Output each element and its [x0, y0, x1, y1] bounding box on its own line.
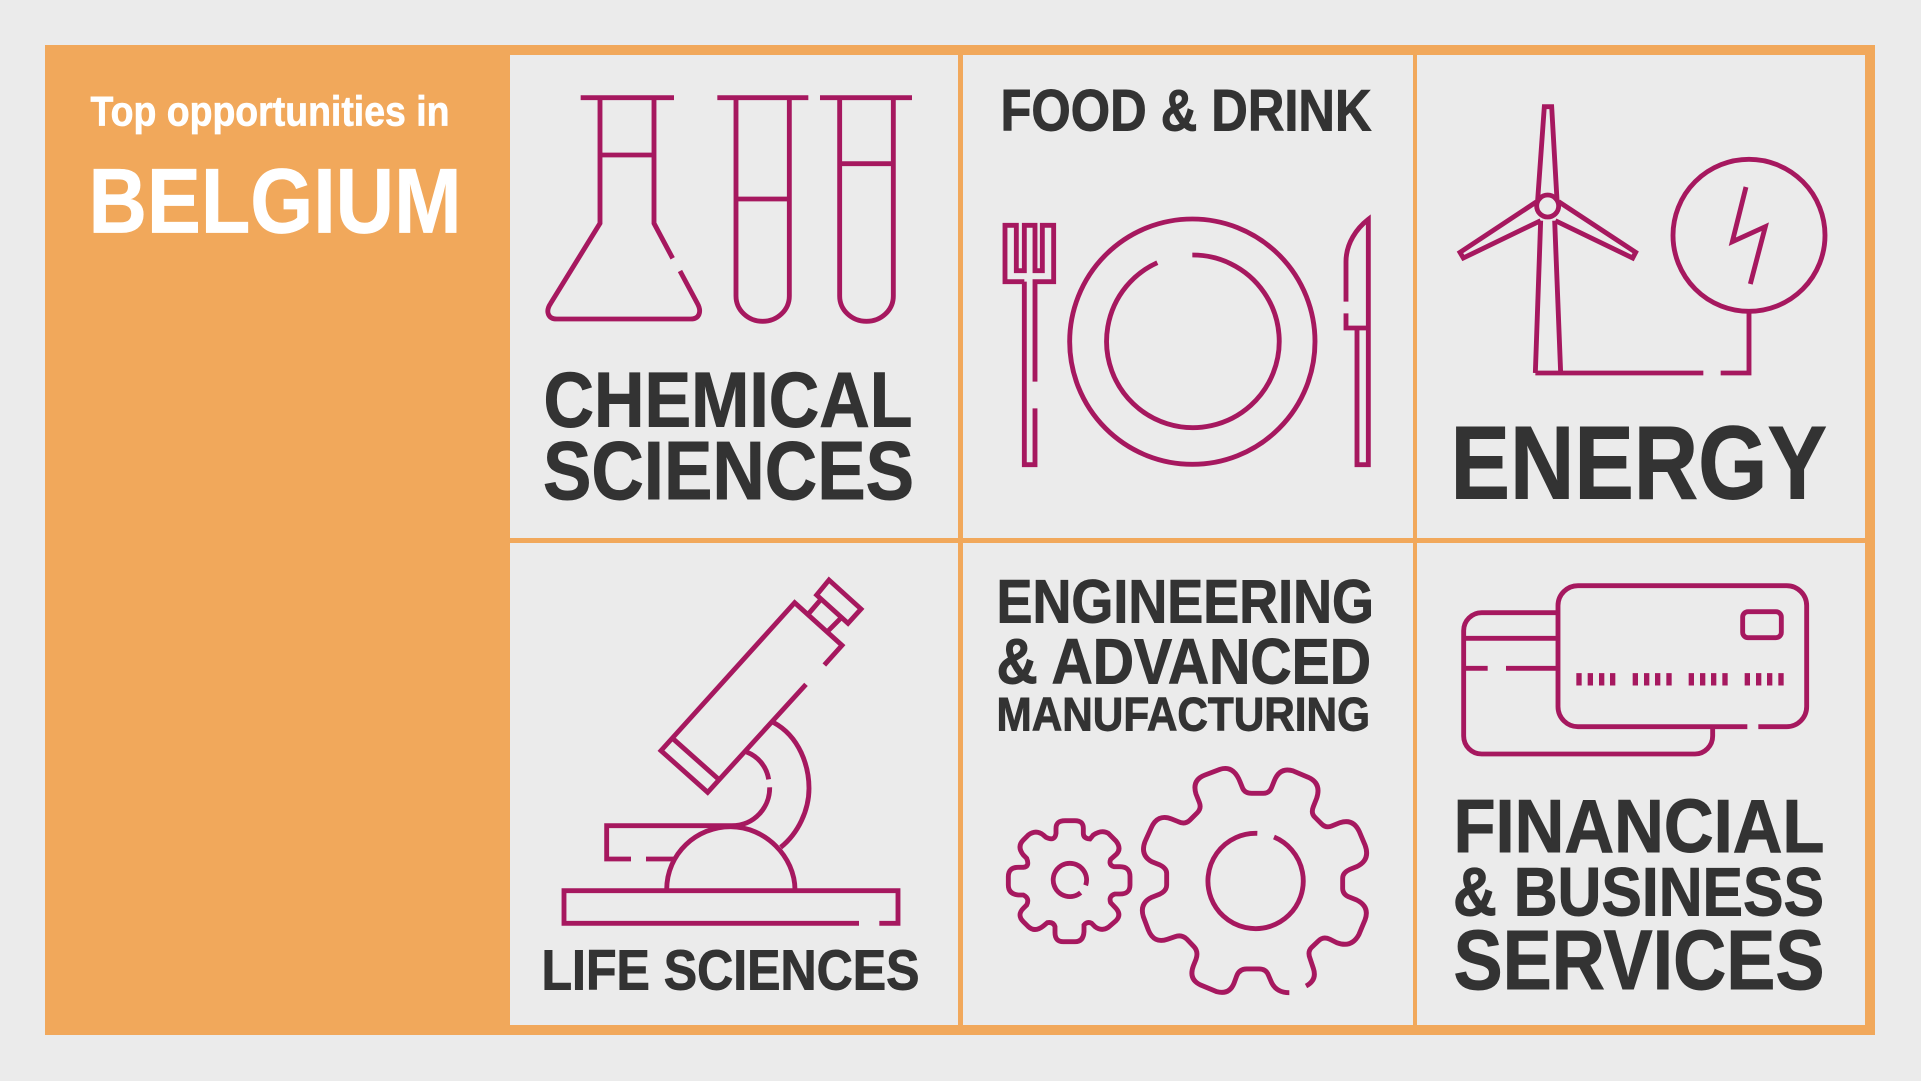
icon: plate fork knife	[1005, 219, 1371, 465]
title intro: Top opportunities in	[90, 88, 450, 135]
panel: engineering and advanced manufacturing	[963, 543, 1413, 1025]
icon: payment cards	[1464, 586, 1807, 754]
panel: financial and business services	[1417, 543, 1865, 1025]
heading	[1453, 785, 1824, 1007]
heading: ENGINEERING	[996, 568, 1374, 636]
heading: CHEMICAL	[544, 356, 912, 444]
heading: SERVICES	[1454, 913, 1824, 1007]
panel: chemical sciences	[510, 55, 958, 538]
heading: FOOD & DRINK	[1000, 79, 1372, 144]
heading: FINANCIAL	[1454, 785, 1824, 869]
heading	[543, 356, 914, 517]
panel: food and drink	[963, 55, 1413, 538]
heading: SCIENCES	[543, 424, 914, 517]
icon: microscope	[564, 580, 898, 923]
title country: BELGIUM	[88, 150, 462, 252]
heading: & ADVANCED	[996, 625, 1371, 697]
icon: gears	[1008, 768, 1367, 993]
icon: flask and test tubes	[548, 98, 912, 321]
heading: & BUSINESS	[1453, 854, 1824, 931]
icon: wind turbine and power	[1460, 107, 1825, 373]
panel: title	[88, 88, 462, 252]
heading: LIFE SCIENCES	[542, 938, 920, 1002]
heading	[996, 568, 1374, 741]
panel: life sciences	[510, 543, 958, 1025]
heading: MANUFACTURING	[996, 688, 1370, 741]
panel: energy	[1417, 55, 1865, 538]
heading: ENERGY	[1450, 405, 1827, 521]
